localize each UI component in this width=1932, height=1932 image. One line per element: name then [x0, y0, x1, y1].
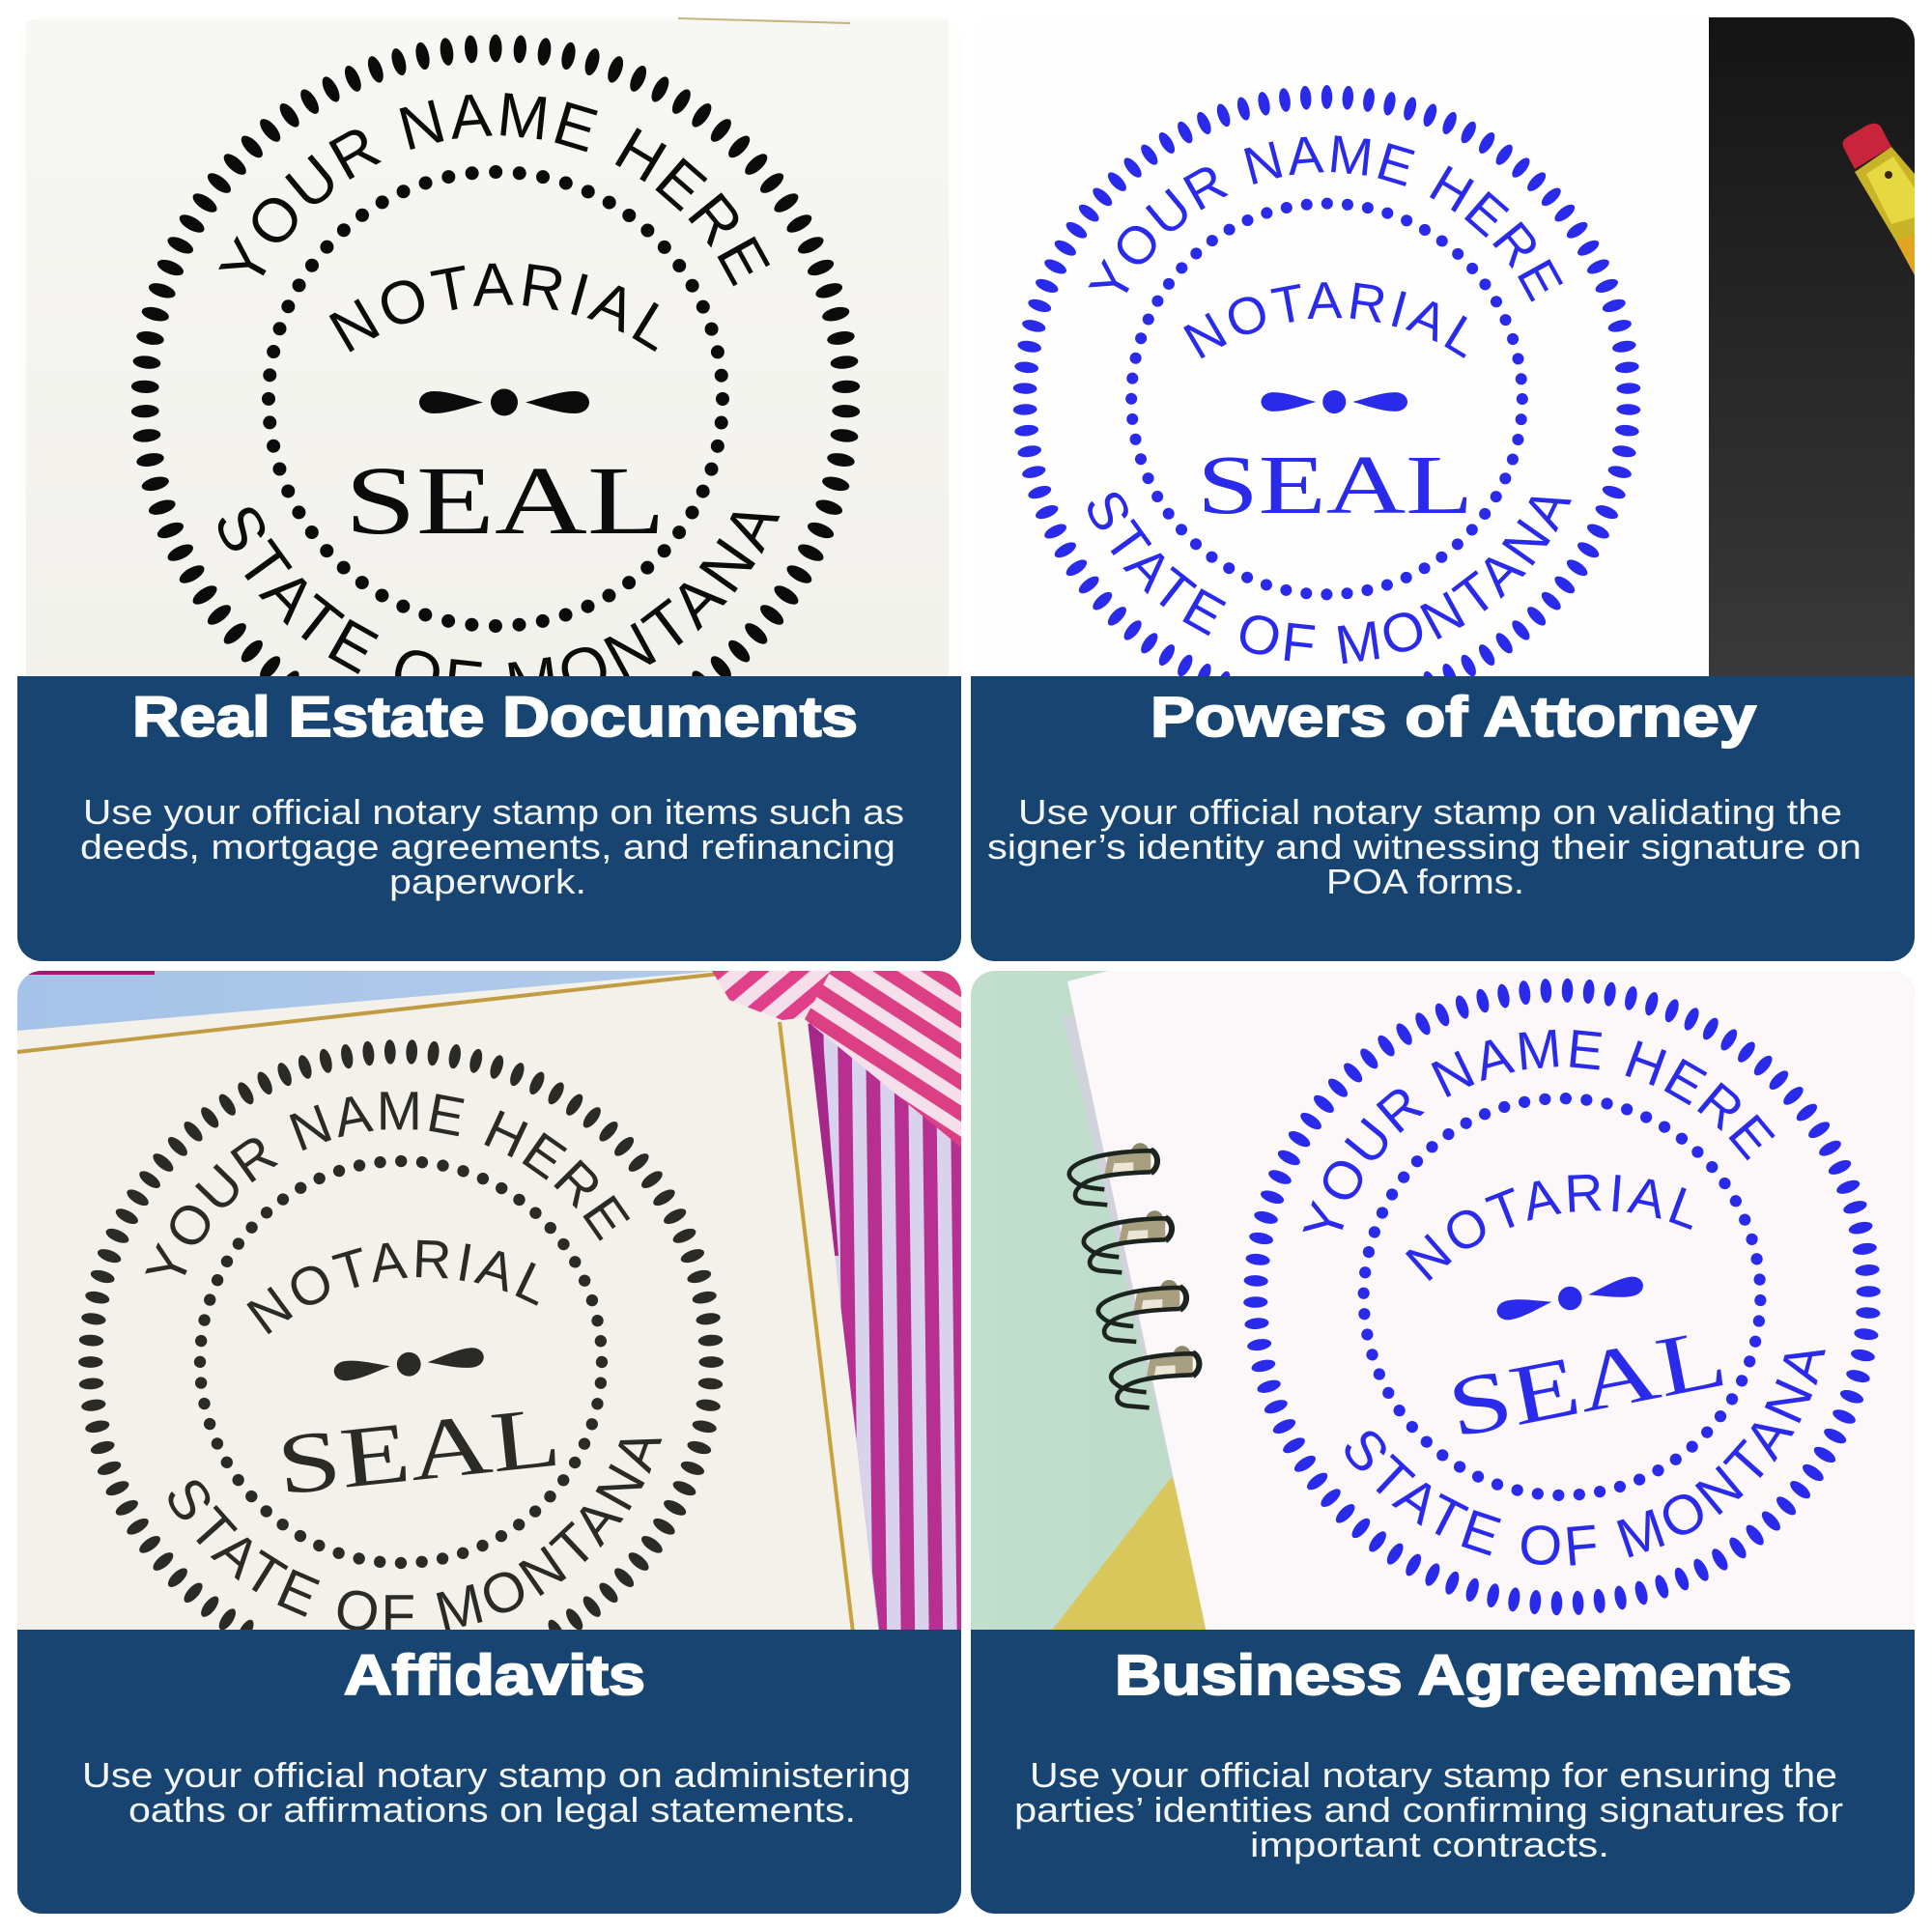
seal: blue notary stamp: STATE OF MONTANA: [1088, 493, 1572, 665]
seal: blue notary stamp, tilted: NOTARIAL: [1405, 1175, 1692, 1281]
panel: business agreements: [971, 971, 1915, 1914]
caption band: [17, 1630, 961, 1914]
photo background: card, gold border and striped ribbon: [17, 971, 961, 1637]
description: [988, 799, 1859, 895]
description: Use your official notary stamp on administering: [82, 1755, 911, 1795]
caption band: [17, 676, 961, 961]
seal: black notary stamp: YOUR NAME HERE: [218, 93, 771, 286]
icon: spiral binding rings: [1069, 1143, 1199, 1407]
seal: blue notary stamp: SEAL: [1197, 439, 1473, 531]
seal: dark notary stamp, tilted: SEAL: [272, 1388, 565, 1514]
description: [85, 1762, 908, 1830]
seal: black notary stamp: STATE OF MONTANA: [218, 507, 781, 676]
panel: powers of attorney: [971, 17, 1915, 961]
photo background: white paper and dark desk: [1709, 17, 1915, 676]
seal: black notary stamp: SEAL: [345, 446, 666, 554]
seal: blue notary stamp: [1012, 85, 1640, 676]
seal: blue notary stamp, tilted: STATE OF MONTANA: [1345, 1350, 1826, 1566]
caption band: [971, 1630, 1915, 1914]
seal: dark notary stamp, tilted: [78, 1039, 724, 1630]
heading: Affidavits: [344, 1644, 645, 1707]
description: POA forms.: [1326, 862, 1524, 901]
seal: black notary stamp: [131, 35, 860, 676]
heading: Powers of Attorney: [1151, 686, 1756, 749]
seal: blue notary stamp: YOUR NAME HERE: [1088, 135, 1563, 302]
seal: blue notary stamp: NOTARIAL: [1183, 282, 1467, 359]
description: Use your official notary stamp on items such as: [83, 792, 904, 832]
seal: dark notary stamp, tilted: YOUR NAME HERE: [145, 1092, 630, 1275]
description: important contracts.: [1250, 1825, 1609, 1864]
icon: pencil eraser: [1843, 124, 1915, 275]
heading: Business Agreements: [1115, 1644, 1792, 1707]
seal: dark notary stamp, tilted: STATE OF MONTANA: [168, 1439, 663, 1630]
panel: real estate documents: [17, 17, 961, 961]
seal: blue notary stamp, tilted: YOUR NAME HERE: [1302, 1030, 1776, 1233]
heading: Real Estate Documents: [132, 686, 858, 749]
seal: blue notary stamp, tilted: SEAL: [1440, 1310, 1734, 1456]
panel: affidavits: [17, 971, 961, 1914]
description: [1014, 1755, 1843, 1864]
caption band: [971, 676, 1915, 961]
description: Use your official notary stamp on validating the: [1018, 792, 1842, 832]
description: oaths or affirmations on legal statements.: [128, 1790, 856, 1830]
description: deeds, mortgage agreements, and refinancing: [80, 827, 895, 867]
description: paperwork.: [389, 862, 586, 901]
photo background: notebook on mint and yellow: [971, 971, 1915, 1637]
photo background: white paper: [17, 17, 961, 684]
seal: black notary stamp: NOTARIAL: [328, 263, 659, 352]
seal: dark notary stamp, tilted: NOTARIAL: [246, 1240, 539, 1335]
description: [80, 792, 904, 901]
seal: blue notary stamp, tilted: [1243, 978, 1881, 1615]
description: Use your official notary stamp for ensuring the: [1030, 1755, 1837, 1795]
description: parties’ identities and confirming signatures for: [1014, 1790, 1843, 1830]
description: signer’s identity and witnessing their signature on: [987, 827, 1861, 867]
